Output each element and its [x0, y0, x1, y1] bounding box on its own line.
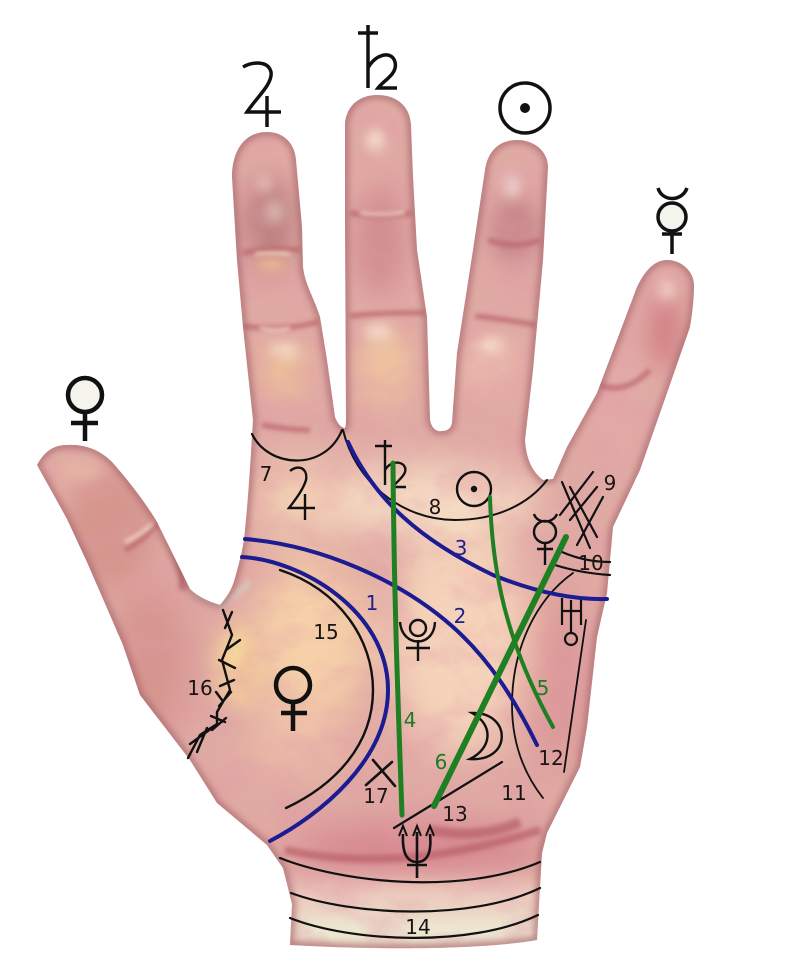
label 13: 13 [442, 802, 468, 826]
blue major lines [242, 442, 607, 841]
line 16: stitched line [188, 610, 240, 758]
mottled watercolour texture [220, 124, 672, 946]
line 8: girdle of Venus [343, 430, 547, 520]
line 5: Apollo line [490, 497, 553, 727]
line 12: straight line [564, 620, 586, 772]
finger highlights [58, 127, 674, 480]
hand illustration [37, 95, 694, 948]
symbol: Pluto [400, 620, 435, 661]
green lines [393, 463, 566, 815]
line 7: ring of Jupiter [252, 430, 342, 460]
line 3: heart line [348, 442, 607, 599]
line 6: health line [434, 537, 566, 806]
symbol: Saturn mount [375, 440, 406, 487]
label 1: 1 [366, 591, 378, 615]
label 16: 16 [187, 676, 213, 700]
line 10: bracelets of Mercury [555, 552, 610, 575]
symbol: Sun mount [457, 472, 491, 506]
creases [125, 213, 650, 859]
symbol: Mercury mount [534, 514, 557, 565]
symbol: Uranus [562, 598, 581, 645]
finger tones [236, 171, 688, 410]
symbol: Venus above thumb [68, 378, 102, 441]
wrist lines 14 [280, 858, 540, 938]
mount symbols on the palm [276, 440, 581, 878]
palm skin tones [110, 462, 583, 874]
symbol: Moon [470, 713, 502, 759]
label 12: 12 [538, 746, 564, 770]
label 4: 4 [404, 708, 416, 732]
label 9: 9 [604, 471, 616, 495]
line 13: diagonal line [394, 762, 502, 828]
line 2: head line [245, 539, 537, 745]
shaded hand edge [37, 95, 694, 948]
symbol: Jupiter mount [289, 468, 315, 520]
symbol: Mercury above little finger [658, 188, 687, 254]
line 4: fate line [393, 463, 402, 815]
label 6: 6 [435, 750, 447, 774]
label 14: 14 [405, 915, 431, 939]
symbol: Venus mount [276, 668, 310, 731]
mark 17: cross [366, 760, 395, 786]
label 3: 3 [455, 536, 467, 560]
wrist tones [65, 470, 545, 948]
pale crease highlights [125, 212, 405, 606]
label 7: 7 [260, 462, 272, 486]
line 11: curved line [512, 573, 573, 798]
line 15: Mars inner arc [280, 570, 373, 808]
symbol: Jupiter above index finger [243, 63, 281, 127]
line 9: Mercury hatch marks [560, 472, 603, 548]
label 11: 11 [501, 781, 527, 805]
symbol: Neptune [399, 826, 434, 878]
label 10: 10 [578, 551, 604, 575]
black mount lines [188, 430, 610, 938]
symbol: Sun above ring finger [500, 83, 550, 133]
symbol: Saturn above middle finger [358, 25, 397, 88]
label 17: 17 [363, 784, 389, 808]
label 8: 8 [429, 495, 441, 519]
number labels [187, 462, 616, 939]
label 15: 15 [313, 620, 339, 644]
label 5: 5 [537, 676, 549, 700]
label 2: 2 [454, 604, 466, 628]
line 1: life line [242, 557, 388, 841]
